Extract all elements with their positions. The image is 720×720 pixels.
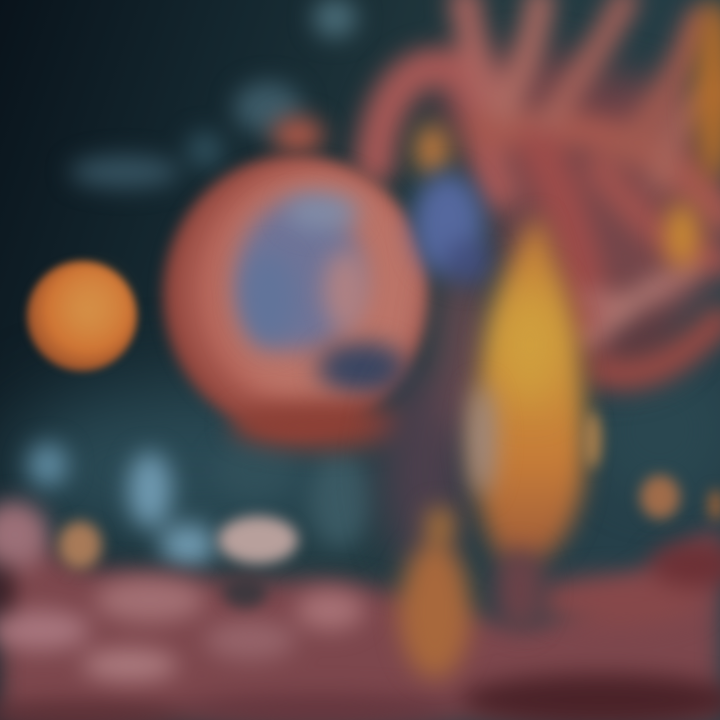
branching red tendrils, upper right	[375, 0, 720, 374]
small orange specks, lower right	[640, 475, 720, 521]
dark red web behind tendrils, upper right	[435, 55, 720, 380]
orange glow, far right edge	[272, 0, 720, 267]
bottom reef-like tissue	[0, 501, 720, 720]
yellow-orange organelle	[468, 215, 601, 565]
blue mass beside cell	[412, 173, 492, 284]
small orange sphere	[27, 261, 137, 371]
orange stalk, bottom centre	[399, 507, 546, 678]
large round cell body	[163, 155, 427, 449]
pale stones, bottom centre	[58, 516, 298, 608]
mauve stem below blue mass	[383, 260, 491, 570]
floating particles: pale blue specks	[28, 0, 370, 567]
